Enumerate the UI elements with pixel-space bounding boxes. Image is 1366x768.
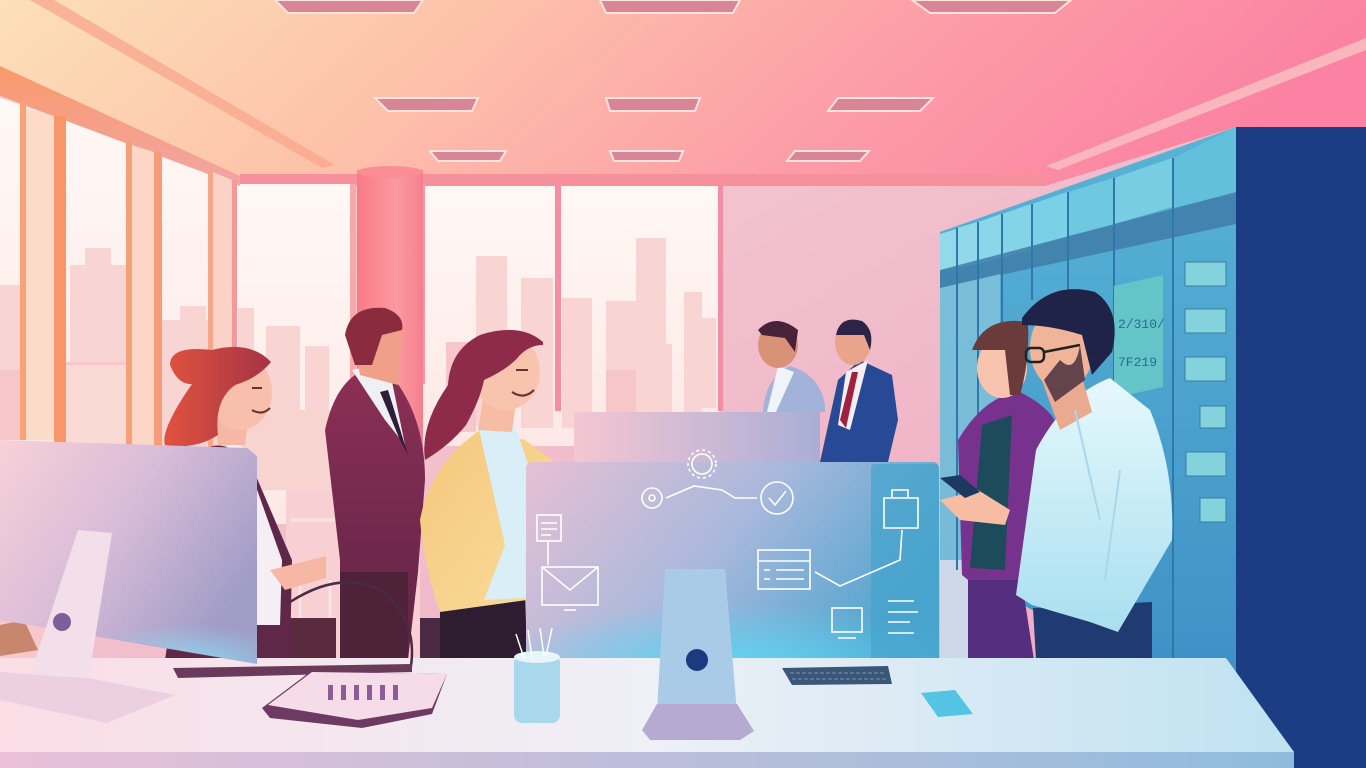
background monitor <box>574 412 820 462</box>
left monitor <box>0 440 257 723</box>
icon: text lines <box>888 601 918 633</box>
icon: check circle <box>761 482 793 514</box>
skyline <box>0 238 716 476</box>
smartphone <box>921 690 973 717</box>
central transparent monitor <box>526 450 939 667</box>
cabinet display <box>1114 275 1165 398</box>
window frames <box>0 66 240 465</box>
cable and desk items <box>173 582 412 678</box>
icon: small monitor <box>832 608 862 638</box>
cabinet display: 2/310/ <box>1118 317 1165 332</box>
person: man in burgundy suit <box>325 308 425 660</box>
pillar <box>357 166 423 460</box>
icon: small circle <box>642 488 662 508</box>
person: standing man right back <box>820 319 898 462</box>
cabinet display: 7F219 <box>1118 355 1157 370</box>
windows with city skyline <box>0 66 723 524</box>
person: woman with ponytail <box>164 347 326 660</box>
lower floor area behind desk <box>0 445 450 660</box>
ceiling <box>0 0 1366 186</box>
person: man with glasses in white shirt <box>1016 289 1172 660</box>
icon: clipboard <box>884 490 918 528</box>
low building <box>240 410 356 490</box>
server cabinets on right <box>940 127 1366 768</box>
ceiling vents <box>275 0 1071 161</box>
potted plant <box>0 620 38 656</box>
person: woman in yellow jacket <box>420 330 552 658</box>
icon: document <box>537 515 561 541</box>
icon: gear <box>688 450 716 478</box>
keyboard <box>782 666 892 685</box>
person: standing man left back <box>758 321 825 412</box>
desk <box>0 658 1294 768</box>
icon: envelope monitor <box>542 567 598 610</box>
notebook <box>262 672 447 728</box>
icon: list panel <box>758 550 810 589</box>
pencil cup <box>514 628 560 723</box>
person: woman in purple suit <box>940 321 1058 660</box>
central monitor stand and base <box>642 569 754 740</box>
cabinet side labels <box>1185 262 1226 522</box>
